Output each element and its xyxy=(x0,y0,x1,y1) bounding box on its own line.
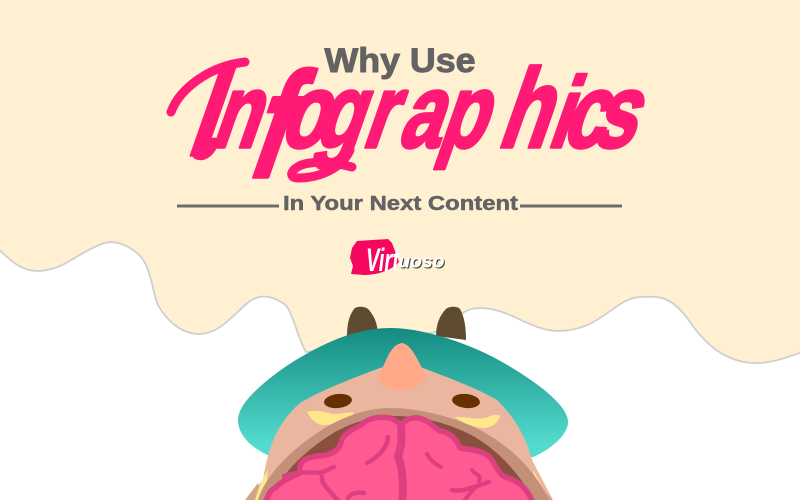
face xyxy=(245,362,553,500)
title flourishes xyxy=(171,62,352,178)
title: Infographics: g xyxy=(305,53,391,169)
subheading with rules: In Your Next Content xyxy=(283,192,518,215)
title: Infographics: o xyxy=(270,53,356,169)
right cheek highlight xyxy=(455,415,500,428)
title: Infographics: h xyxy=(487,47,580,171)
hat brim xyxy=(238,328,568,470)
icon: nose xyxy=(377,343,428,391)
character xyxy=(238,307,568,500)
title: Infographics xyxy=(166,37,671,209)
logo: Virtuoso: uoso xyxy=(400,252,446,272)
left side highlight xyxy=(255,470,268,500)
heading: Why Use: Why Use xyxy=(324,42,476,80)
title: Infographics: a xyxy=(389,53,471,169)
title: Infographics: p xyxy=(429,53,515,169)
title: Infographics: i xyxy=(538,58,597,169)
icon: right eye xyxy=(451,393,481,409)
icon: left ear xyxy=(347,307,378,338)
brain xyxy=(264,417,535,500)
title: Infographics: s xyxy=(583,53,665,169)
title: Infographics: n xyxy=(201,53,288,169)
mouth rim xyxy=(258,408,549,500)
logo: Virtuoso: Virt xyxy=(366,242,400,278)
mouth interior xyxy=(270,416,534,500)
icon: left eye xyxy=(323,393,353,409)
title: Infographics: c xyxy=(552,53,634,169)
brain fissures xyxy=(284,425,489,500)
background: cream dripping shape xyxy=(0,0,800,363)
title: Infographics: I xyxy=(175,37,252,183)
logo: Virtuoso: uoso xyxy=(398,252,445,272)
title: Infographics: r xyxy=(353,53,422,169)
title: Infographics: f xyxy=(232,41,327,209)
subheading with rules xyxy=(177,192,622,215)
right side highlight xyxy=(533,470,547,500)
left cheek highlight xyxy=(307,411,354,425)
icon: right ear xyxy=(436,307,466,340)
logo: Virtuoso xyxy=(350,239,446,278)
